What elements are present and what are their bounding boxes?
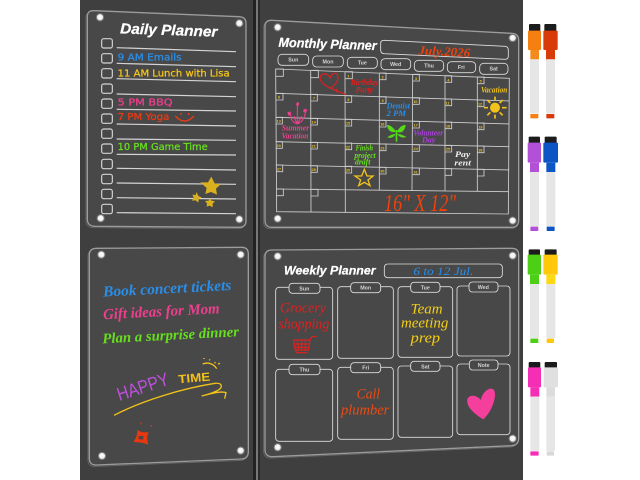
weekday labels: Tue [358, 61, 367, 67]
calendar grid: 16 [380, 123, 384, 127]
marker: purple [528, 137, 541, 231]
weekday labels: Mon [323, 59, 333, 65]
calendar grid: 29 [346, 169, 350, 173]
handwritten note: team meeting [401, 301, 448, 346]
handwritten note: grocery: Grocery [280, 300, 326, 316]
icon: pink heart [467, 389, 495, 419]
weekday labels: Sat [490, 67, 498, 73]
calendar grid: 3 [415, 77, 417, 81]
icon: heart doodle [320, 73, 346, 95]
calendar grid: 17 [414, 124, 418, 128]
heading: Weekly Planner: Weekly Planner [284, 264, 377, 278]
icon: sun [484, 97, 507, 119]
month box: July.2026 [417, 43, 471, 60]
calendar grid: 31 [414, 170, 418, 174]
calendar grid: 7 [313, 97, 315, 101]
checklist entries [118, 53, 230, 153]
weekday labels: Fri [458, 65, 465, 71]
heading: Daily Planner: Daily Planner [120, 21, 219, 41]
calendar grid: 28 [312, 168, 316, 172]
calendar grid: 26 [478, 148, 482, 152]
handwritten note: team meeting: prep [410, 330, 440, 346]
calendar grid: 4 [447, 78, 450, 82]
calendar grid: 21 [312, 145, 316, 149]
heading: Monthly Planner: Monthly Planner [278, 35, 378, 53]
marker: pink [528, 362, 541, 456]
size label: 16" X 12" [384, 190, 456, 217]
day boxes: Sun [299, 286, 309, 292]
calendar grid: 2 [382, 76, 384, 80]
calendar notes: Summer [282, 123, 310, 133]
doodle: happy time: TIME [178, 370, 211, 386]
day boxes: Note [478, 363, 490, 369]
calendar grid: 27 [277, 167, 281, 171]
calendar notes: draft [355, 157, 371, 167]
icon: cart [293, 337, 317, 353]
calendar grid: 18 [446, 124, 450, 128]
date range box: 6 to 12 Jul. [413, 264, 473, 278]
calendar grid: 12 [478, 102, 482, 106]
weekday labels: Sun [288, 58, 298, 64]
panel: daily planner [86, 11, 246, 229]
handwritten note: team meeting: Team [411, 301, 443, 317]
calendar notes: Day [421, 135, 435, 145]
calendar notes: project [353, 150, 376, 160]
checklist entries: 5 PM BBQ [118, 97, 173, 108]
panel: notes board [88, 247, 248, 466]
calendar grid: 9 [382, 99, 384, 103]
handwritten note: tickets: Book concert tickets [102, 277, 232, 301]
calendar grid: 30 [380, 170, 384, 174]
handwritten note: gift: Gift ideas for Mom [103, 300, 220, 323]
calendar notes: Vacation [282, 131, 308, 141]
marker: orange [528, 24, 541, 118]
calendar notes: Party [356, 84, 373, 94]
calendar grid: 20 [277, 144, 281, 148]
handwritten note: plumber: Call [357, 386, 380, 402]
calendar grid: 15 [346, 122, 350, 126]
marker: green [528, 249, 541, 343]
icon: fireworks [288, 103, 307, 124]
calendar grid: 19 [478, 125, 482, 129]
calendar grid: 23 [380, 146, 384, 150]
icon: plant [387, 125, 406, 142]
day boxes: Tue [421, 285, 430, 291]
marker: white [544, 362, 558, 456]
icon: stars [192, 177, 221, 207]
day boxes: Fri [362, 366, 370, 372]
month box [381, 40, 508, 60]
calendar grid: 1 [347, 74, 349, 78]
calendar notes: rent [454, 157, 472, 167]
checklist entries: 9 AM Emails [118, 53, 182, 64]
weekday labels: Thu [424, 64, 434, 70]
calendar notes: Vacation [481, 84, 507, 94]
date range box [384, 264, 502, 278]
handwritten note: team meeting: meeting [401, 316, 448, 332]
day boxes [276, 282, 510, 441]
marker: blue [543, 137, 558, 231]
checklist entries: 11 AM Lunch with Lisa [118, 68, 230, 79]
calendar notes [282, 77, 507, 167]
calendar notes: Birthday [350, 77, 378, 87]
calendar grid: 25 [446, 148, 450, 152]
checklist entries: 10 PM Game Time [118, 142, 208, 153]
panel: weekly planner [264, 248, 519, 458]
handwritten note: dinner: Plan a surprise dinner [102, 324, 240, 347]
date boxes [276, 69, 484, 196]
calendar grid: 14 [312, 121, 317, 125]
handwritten note: plumber [340, 386, 390, 418]
marker: red [543, 24, 558, 118]
calendar grid: 6 [278, 96, 280, 100]
calendar notes: Volunteer [413, 127, 444, 137]
day boxes: Wed [478, 285, 489, 291]
calendar grid: 24 [414, 147, 419, 151]
dark background wall [80, 0, 523, 480]
calendar grid: 10 [413, 100, 417, 104]
handwritten note: plumber: plumber [340, 402, 390, 418]
checklist boxes [102, 39, 112, 214]
icon: star [355, 169, 373, 186]
icon: red doodle [133, 422, 152, 445]
panel: monthly planner [264, 20, 519, 229]
calendar grid: 5 [480, 80, 482, 84]
weekday labels: Wed [390, 62, 401, 68]
calendar notes: Pay [455, 149, 470, 159]
day boxes: Thu [299, 367, 309, 373]
icon: smiley [175, 113, 194, 121]
calendar grid: 22 [346, 145, 350, 149]
calendar notes: Dentist [386, 100, 411, 110]
calendar notes: 2 PM [386, 108, 406, 118]
calendar grid: 11 [446, 101, 450, 105]
marker: yellow [543, 249, 558, 343]
calendar grid: 8 [347, 98, 349, 102]
doodle: happy time [114, 358, 226, 415]
calendar grid: 13 [277, 120, 281, 124]
checklist entries: 7 PM Yoga [118, 112, 169, 123]
weekday labels [278, 54, 508, 74]
checklist lines [117, 48, 236, 214]
doodle: happy time: HAPPY [114, 368, 172, 405]
day boxes: Mon [360, 286, 371, 292]
handwritten note: grocery: shopping [278, 316, 329, 332]
handwritten note: grocery [278, 300, 329, 332]
calendar grid [276, 69, 509, 214]
calendar notes: Finish [355, 143, 373, 153]
day boxes: Sat [421, 364, 430, 370]
